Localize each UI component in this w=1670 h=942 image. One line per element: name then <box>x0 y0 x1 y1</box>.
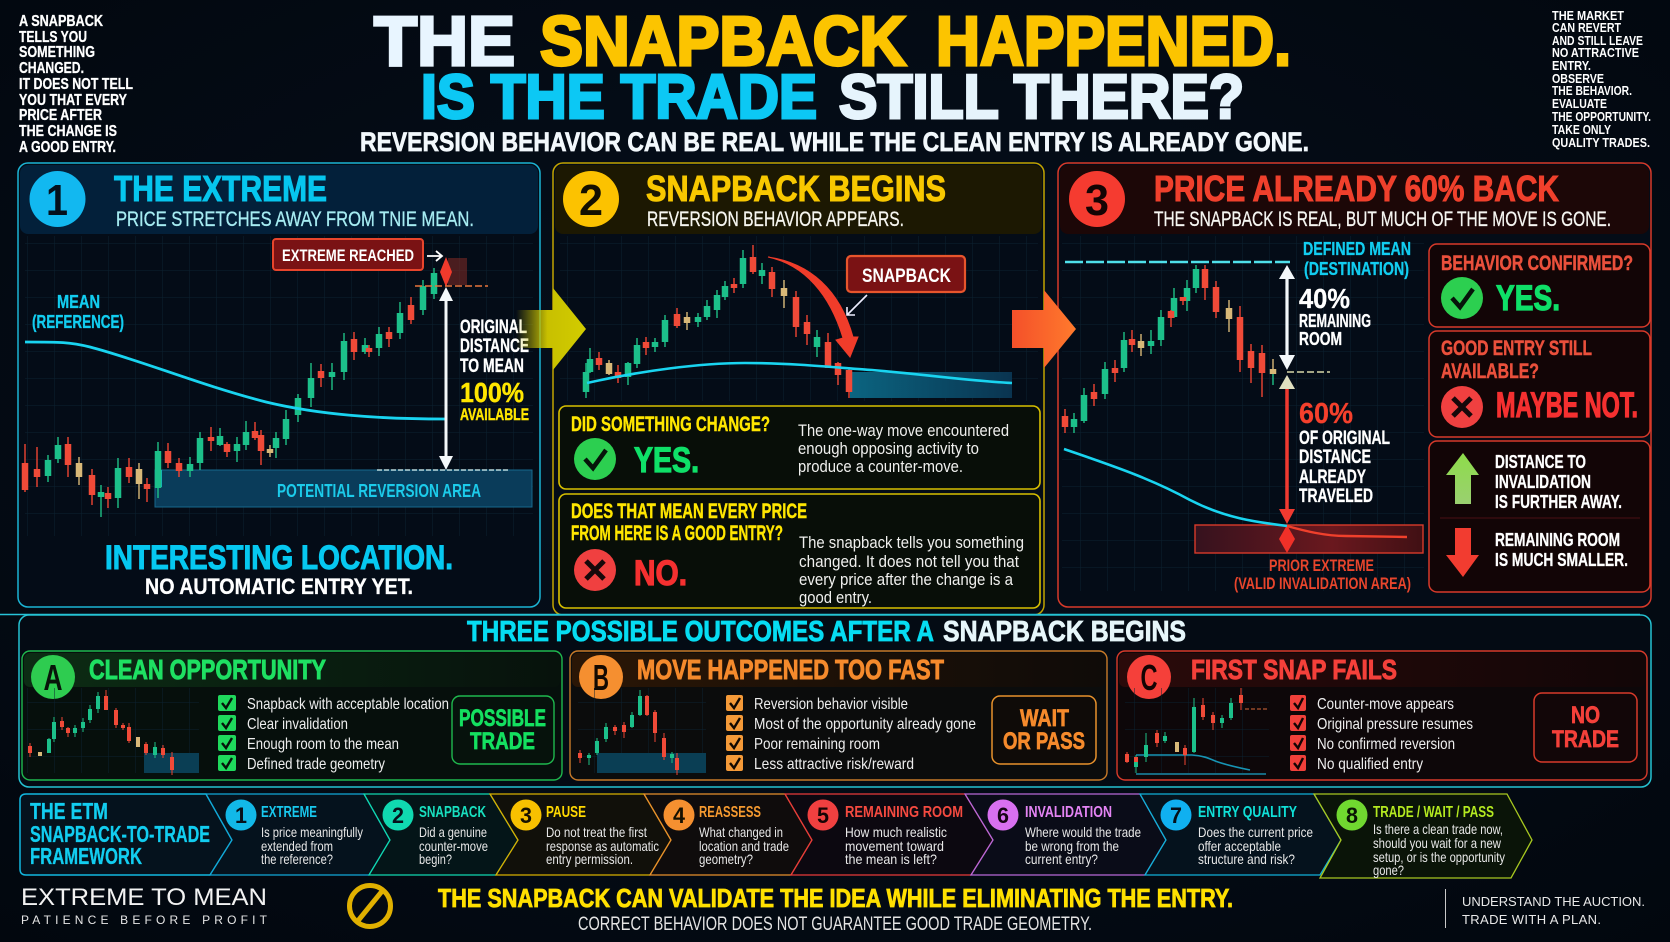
step 7 <box>1140 794 1341 875</box>
mean label: (REFERENCE) <box>32 312 124 332</box>
note: top right: CAN REVERT <box>1552 20 1621 35</box>
original distance label: DISTANCE <box>460 336 529 357</box>
panel 2 header band <box>555 165 1042 234</box>
step 1: 1 <box>235 803 247 828</box>
title: SNAPBACK <box>540 2 906 80</box>
checklist C: Original pressure resumes <box>1317 716 1473 733</box>
badge 2 <box>563 171 619 227</box>
note: top left: SOMETHING <box>19 44 95 61</box>
reversion zone <box>850 372 1012 398</box>
question box: did something change: DID SOMETHING CHANGE? <box>571 413 770 436</box>
outcome B: move happened too fast <box>570 651 1107 780</box>
mini chart A <box>27 688 199 775</box>
framework title: SNAPBACK-TO-TRADE <box>30 821 210 847</box>
outcome A: clean opportunity: A <box>44 657 62 698</box>
bottom message: THE SNAPBACK CAN VALIDATE THE IDEA WHILE ELIMINATING THE ENTRY. <box>438 883 1233 913</box>
mean line <box>25 342 446 419</box>
box: behavior confirmed <box>1429 244 1650 327</box>
step 1: EXTREME <box>261 804 317 821</box>
step 3: response as automatic <box>546 838 659 854</box>
question box: good entry: The snapback tells you something <box>799 533 1024 552</box>
bottom message: CORRECT BEHAVIOR DOES NOT GUARANTEE GOOD TRADE GEOMETRY. <box>578 914 1092 935</box>
step 4: 4 <box>673 803 686 828</box>
60 percent label: DISTANCE <box>1299 447 1371 468</box>
checklist A: Clear invalidation <box>247 716 348 733</box>
candlestick chart: snapback <box>586 245 849 398</box>
panel 3 header band <box>1060 165 1649 234</box>
step 2: 2 <box>392 803 404 828</box>
framework title: THE ETM <box>30 798 108 824</box>
note: top right: ENTRY. <box>1552 58 1591 73</box>
mean line <box>587 363 1012 383</box>
note: top left: THE CHANGE IS <box>19 123 117 140</box>
60 percent label: OF ORIGINAL <box>1299 428 1390 449</box>
panel 1 conclusion: NO AUTOMATIC ENTRY YET. <box>145 574 413 599</box>
snapback callout: SNAPBACK <box>862 266 951 287</box>
mean label: MEAN <box>57 292 100 312</box>
step 1: the reference? <box>261 851 333 867</box>
candlestick chart: price back <box>1065 265 1273 433</box>
step 8: Is there a clean trade now, <box>1373 821 1503 837</box>
outcome B: move happened too fast: MOVE HAPPENED TOO FAST <box>637 654 944 685</box>
step 4 <box>644 794 812 875</box>
verdict B: OR PASS <box>1003 728 1085 755</box>
defined mean line <box>1065 261 1290 263</box>
note: top right: THE BEHAVIOR. <box>1552 83 1632 98</box>
box: distance and room: DISTANCE TO <box>1495 452 1586 472</box>
step 4: REASSESS <box>699 804 761 821</box>
step 5: 5 <box>817 803 829 828</box>
badge 3 <box>1069 171 1125 227</box>
icon: up arrow <box>1446 453 1479 504</box>
step 3 <box>490 794 671 875</box>
note: top right <box>1552 8 1651 150</box>
box: good entry still available <box>1429 331 1650 437</box>
checklist A: Enough room to the mean <box>247 736 399 753</box>
step 8: TRADE / WAIT / PASS <box>1373 804 1494 821</box>
outcomes heading: SNAPBACK BEGINS <box>943 616 1186 648</box>
step 3: Do not treat the first <box>546 824 647 840</box>
panel 2 heading: SNAPBACK BEGINS <box>646 168 946 209</box>
box: distance and room: IS MUCH SMALLER. <box>1495 550 1628 570</box>
question box: good entry: FROM HERE IS A GOOD ENTRY? <box>571 522 783 545</box>
step 8: 8 <box>1346 803 1358 828</box>
outcome A: clean opportunity <box>22 651 562 780</box>
defined mean label: (DESTINATION) <box>1304 259 1409 279</box>
panel 1 conclusion: INTERESTING LOCATION. <box>105 539 453 577</box>
mean line <box>1064 449 1287 526</box>
icon: check <box>574 438 616 480</box>
arrow: panel 1 to panel 2 <box>516 288 586 370</box>
checklist A: Defined trade geometry <box>247 756 385 773</box>
mini chart B <box>578 688 706 775</box>
outcome B: move happened too fast: B <box>593 657 609 698</box>
icon: cross <box>574 549 616 591</box>
step 6: 6 <box>997 803 1009 828</box>
brand: EXTREME TO MEAN <box>21 884 267 911</box>
question box: good entry: DOES THAT MEAN EVERY PRICE <box>571 500 807 523</box>
outcome A: clean opportunity: CLEAN OPPORTUNITY <box>89 654 326 685</box>
note: top left: TELLS YOU <box>19 29 87 46</box>
step 2: SNAPBACK <box>419 804 486 821</box>
60 percent label: TRAVELED <box>1299 486 1373 507</box>
title: THE <box>374 2 515 80</box>
prior extreme label <box>1234 556 1411 593</box>
title: HAPPENED. <box>936 2 1291 80</box>
mean label <box>32 292 124 332</box>
step 5 <box>785 794 993 875</box>
extreme reached callout <box>273 239 442 270</box>
badge 2: 2 <box>579 176 603 225</box>
note: top right: OBSERVE <box>1552 71 1604 86</box>
outcome C: first snap fails: C <box>1140 657 1158 698</box>
step 5: REMAINING ROOM <box>845 804 963 821</box>
framework chevron strip <box>20 794 1532 878</box>
extreme marker <box>415 257 488 287</box>
question box: good entry <box>559 494 1040 608</box>
title <box>360 2 1309 157</box>
question box: good entry: NO. <box>634 554 687 593</box>
panel 1: the extreme <box>18 163 540 607</box>
step 1 <box>206 794 390 875</box>
bottom message <box>438 883 1233 935</box>
panel 1 conclusion <box>105 539 453 599</box>
closing note: TRADE WITH A PLAN. <box>1462 912 1601 927</box>
40 percent label: 40% <box>1299 283 1350 314</box>
panel 1 header band <box>20 165 538 234</box>
panel 2: snapback begins <box>553 163 1044 615</box>
40 percent label <box>1299 283 1371 349</box>
panel 2 subheading: REVERSION BEHAVIOR APPEARS. <box>647 208 904 231</box>
question box: good entry: every price after the change is a <box>799 570 1013 589</box>
step 4: What changed in <box>699 824 783 840</box>
original distance label: TO MEAN <box>460 356 524 377</box>
step 1: Is price meaningfully <box>261 824 363 840</box>
60 percent label: ALREADY <box>1299 467 1366 488</box>
question box: did something change: YES. <box>634 441 699 480</box>
note: top right: EVALUATE <box>1552 96 1607 111</box>
step 1: extended from <box>261 838 333 854</box>
closing note: UNDERSTAND THE AUCTION. <box>1462 894 1645 909</box>
box: distance and room: IS FURTHER AWAY. <box>1495 492 1622 512</box>
step 7: ENTRY QUALITY <box>1198 804 1297 821</box>
question box: did something change: The one-way move encountered <box>798 421 1009 440</box>
note: top left <box>19 13 133 156</box>
outcome C: first snap fails: FIRST SNAP FAILS <box>1191 654 1397 685</box>
outcomes panel <box>0 614 1651 787</box>
note: top left: CHANGED. <box>19 60 84 77</box>
extreme reached callout: EXTREME REACHED <box>282 246 414 265</box>
note: top right: TAKE ONLY <box>1552 122 1611 137</box>
verdict C: TRADE <box>1552 726 1619 753</box>
box: good entry still available: GOOD ENTRY STILL <box>1441 337 1592 360</box>
title: IS THE TRADE <box>421 63 817 132</box>
note: top left: A SNAPBACK <box>19 13 103 30</box>
checklist B: Poor remaining room <box>754 736 880 753</box>
badge 1 <box>30 171 86 227</box>
verdict B <box>992 696 1096 764</box>
step 3: 3 <box>520 803 532 828</box>
snapback curved arrow <box>768 257 858 357</box>
box: behavior confirmed: YES. <box>1496 279 1560 318</box>
checklist B: Reversion behavior visible <box>754 696 908 713</box>
step 7: Does the current price <box>1198 824 1313 840</box>
step 2: Did a genuine <box>419 824 487 840</box>
40 percent label: ROOM <box>1299 329 1342 349</box>
note: top right: NO ATTRACTIVE <box>1552 45 1639 60</box>
framework title <box>20 794 232 875</box>
defined mean label <box>1303 239 1411 279</box>
step 2 <box>364 794 518 875</box>
icon: check <box>1441 277 1483 319</box>
defined mean label: DEFINED MEAN <box>1303 239 1411 259</box>
snapback callout <box>847 256 965 315</box>
checklist C: No confirmed reversion <box>1317 736 1455 753</box>
mini chart C <box>1125 688 1269 774</box>
step 8: gone? <box>1373 862 1404 878</box>
panel 3 heading: PRICE ALREADY 60% BACK <box>1154 168 1559 209</box>
step 8: should you wait for a new <box>1373 835 1502 851</box>
checklist B <box>726 695 976 773</box>
step 7: 7 <box>1170 803 1182 828</box>
title: REVERSION BEHAVIOR CAN BE REAL WHILE THE CLEAN ENTRY IS ALREADY GONE. <box>360 127 1309 157</box>
question box: good entry: good entry. <box>799 588 872 607</box>
brand: PATIENCE BEFORE PROFIT <box>21 913 268 927</box>
checklist B: Less attractive risk/reward <box>754 756 914 773</box>
original distance arrow <box>377 287 510 470</box>
checklist B: Most of the opportunity already gone <box>754 716 976 733</box>
step 2: counter-move <box>419 838 488 854</box>
icon: down arrow <box>1446 528 1479 577</box>
verdict A: TRADE <box>470 728 535 755</box>
panel 1 heading: THE EXTREME <box>114 168 327 209</box>
step 4: geometry? <box>699 851 753 867</box>
step 6: Where would the trade <box>1025 824 1141 840</box>
40 percent label: REMAINING <box>1299 311 1371 331</box>
prior extreme zone <box>1195 525 1423 553</box>
checklist A: Snapback with acceptable location <box>247 696 449 713</box>
brand <box>21 884 268 927</box>
60 percent label: 60% <box>1299 398 1353 430</box>
60 percent label <box>1299 398 1390 507</box>
icon: cross <box>1441 386 1483 428</box>
box: good entry still available: AVAILABLE? <box>1441 360 1539 383</box>
step 5: movement toward <box>845 838 944 854</box>
original distance label: ORIGINAL <box>460 317 527 338</box>
verdict C: NO <box>1571 702 1600 729</box>
step 4: location and trade <box>699 838 789 854</box>
step 6: be wrong from the <box>1025 838 1119 854</box>
verdict A: POSSIBLE <box>459 705 546 732</box>
outcomes heading: THREE POSSIBLE OUTCOMES AFTER A <box>467 616 934 648</box>
question box: did something change: produce a counter-move. <box>798 457 963 476</box>
box: distance and room: REMAINING ROOM <box>1495 530 1620 550</box>
icon: prohibition sign <box>350 886 390 926</box>
original distance label: 100% <box>460 377 524 408</box>
arrow: panel 2 to panel 3 <box>1012 290 1076 368</box>
verdict B: WAIT <box>1020 705 1069 732</box>
note: top right: AND STILL LEAVE <box>1552 33 1643 48</box>
checklist C <box>1290 695 1473 773</box>
potential reversion area <box>155 470 532 507</box>
step 2: begin? <box>419 851 452 867</box>
box: distance and room: INVALIDATION <box>1495 472 1591 492</box>
step 6: current entry? <box>1025 851 1098 867</box>
step 6: INVALIDATION <box>1025 804 1112 821</box>
candlestick chart: extreme <box>25 268 434 517</box>
verdict C <box>1534 693 1637 762</box>
badge 1: 1 <box>46 176 68 225</box>
step 8: setup, or is the opportunity <box>1373 849 1505 865</box>
panel 1 subheading: PRICE STRETCHES AWAY FROM TNIE MEAN. <box>116 208 474 231</box>
closing note <box>1446 889 1645 928</box>
verdict A <box>452 696 554 764</box>
question box: did something change <box>559 406 1040 489</box>
question box: good entry: changed. It does not tell you that <box>799 552 1019 571</box>
step 6 <box>965 794 1166 875</box>
original distance label: AVAILABLE <box>460 405 529 424</box>
step 5: How much realistic <box>845 824 947 840</box>
step 7: offer acceptable <box>1198 838 1281 854</box>
checklist C: No qualified entry <box>1317 756 1423 773</box>
title: STILL THERE? <box>839 63 1244 132</box>
framework title: FRAMEWORK <box>30 843 142 869</box>
badge 3: 3 <box>1085 176 1109 225</box>
note: top right: THE MARKET <box>1552 8 1624 23</box>
checklist A <box>218 695 449 773</box>
step 8 <box>1314 794 1532 878</box>
note: top left: YOU THAT EVERY <box>19 92 127 109</box>
panel 3: price already 60% back <box>1058 163 1651 607</box>
step 7: structure and risk? <box>1198 851 1295 867</box>
prior extreme label: (VALID INVALIDATION AREA) <box>1234 574 1411 593</box>
note: top right: QUALITY TRADES. <box>1552 135 1650 150</box>
question box: did something change: enough opposing activity to <box>798 439 979 458</box>
remaining room arrow <box>1279 265 1330 372</box>
step 3: entry permission. <box>546 851 633 867</box>
box: distance and room <box>1429 441 1650 592</box>
checklist C: Counter-move appears <box>1317 696 1454 713</box>
step 3: PAUSE <box>546 804 586 821</box>
potential reversion area: POTENTIAL REVERSION AREA <box>277 481 481 501</box>
note: top left: IT DOES NOT TELL <box>19 76 133 93</box>
outcome C: first snap fails <box>1117 651 1647 780</box>
step 5: the mean is left? <box>845 851 937 867</box>
note: top left: PRICE AFTER <box>19 107 102 124</box>
prior extreme label: PRIOR EXTREME <box>1269 556 1374 575</box>
traveled arrow <box>1279 375 1295 524</box>
original distance label <box>460 317 529 424</box>
note: top left: A GOOD ENTRY. <box>19 139 116 156</box>
